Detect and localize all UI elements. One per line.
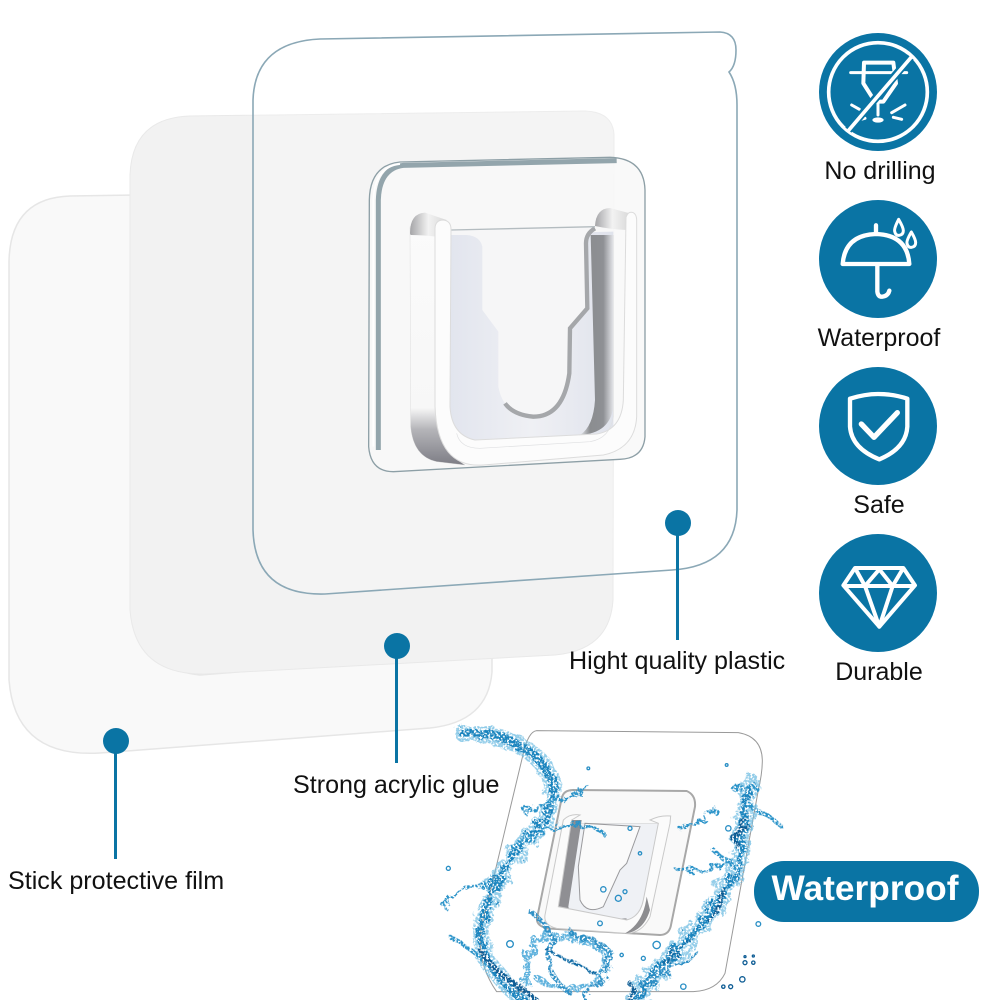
callout: plastic dot and leader — [665, 510, 691, 640]
hook right shadow — [580, 235, 613, 435]
hook left wall — [410, 227, 465, 465]
hook white U frame — [435, 212, 637, 465]
icon: no drilling — [819, 33, 937, 151]
hook top line — [451, 227, 595, 230]
callout: film dot and leader — [103, 728, 129, 859]
panel: high quality plastic sheet — [253, 32, 737, 594]
icon: durable diamond — [819, 534, 937, 652]
small hook cut-out — [578, 823, 640, 910]
water droplets — [446, 764, 761, 989]
label: durable: Durable — [835, 658, 923, 686]
label: glue: Strong acrylic glue — [293, 771, 499, 799]
icon: safe shield — [819, 367, 937, 485]
illustration: small hook with water splash — [443, 731, 780, 1000]
small sheet outline — [480, 731, 762, 992]
dark droplets — [722, 955, 755, 989]
badge: waterproof — [754, 861, 979, 922]
small hook plate — [562, 823, 660, 920]
hook back plate — [450, 232, 613, 440]
label: no drilling: No drilling — [824, 157, 936, 185]
label: plastic: Hight quality plastic — [569, 647, 785, 675]
hook right cap — [595, 208, 630, 230]
icon: waterproof umbrella — [819, 200, 937, 318]
badge: waterproof: Waterproof — [772, 869, 959, 908]
small hook frame — [545, 815, 671, 933]
hook cut-out edge — [505, 228, 595, 417]
hook: large suction hook — [369, 157, 645, 472]
panel: strong acrylic glue sheet — [130, 111, 614, 674]
hook frame inner line — [457, 235, 613, 448]
hook base edge highlight — [378, 161, 617, 450]
hook base white separator — [373, 164, 400, 447]
small hook base — [537, 790, 695, 935]
label: film: Stick protective film — [8, 867, 224, 895]
callout: glue dot and leader — [384, 633, 410, 763]
water splash — [443, 733, 780, 1000]
hook left cap — [410, 213, 447, 237]
label: waterproof: Waterproof — [818, 324, 940, 352]
small hook corner shadow — [625, 897, 650, 933]
hook base plate — [369, 157, 645, 472]
small hook dark wall — [557, 820, 627, 923]
panel: stick protective film sheet — [9, 195, 492, 753]
label: safe: Safe — [853, 491, 905, 519]
hook central cut-out — [451, 227, 593, 417]
